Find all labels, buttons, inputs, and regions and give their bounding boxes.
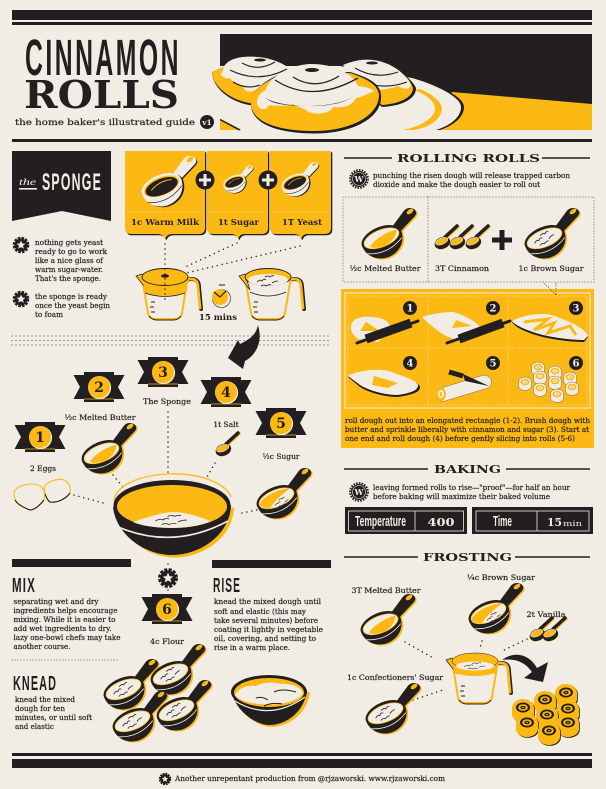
left roll xyxy=(212,57,300,106)
text block: sponge ready note: the sponge is ready xyxy=(35,293,107,301)
ingredient 5: sugar: 5 xyxy=(276,416,286,432)
title xyxy=(24,29,181,117)
footer credit: Another unrepentant production from @rjzaworski. www.rjzaworski.com xyxy=(174,775,445,783)
footer credit xyxy=(160,774,445,784)
panel: mix xyxy=(12,559,131,651)
arrow: to mixing bowl xyxy=(228,325,260,369)
heading: baking: BAKING xyxy=(434,462,501,476)
text block: proof note: leaving formed rolls to rise—"proof"—for half an hour xyxy=(373,484,571,492)
instructions: roll dough out into an elongated rectangle (1-2). Brush dough with xyxy=(345,417,590,425)
ingredient 5: sugar xyxy=(253,408,313,526)
ingredient 6: flour: 6 xyxy=(162,602,172,618)
step 4 xyxy=(348,356,420,397)
frosted rolls xyxy=(512,684,580,746)
plus signs xyxy=(196,170,278,190)
ingredient 4: salt: 1t Salt xyxy=(213,420,239,429)
text block: yeast note: warm sugar-water. xyxy=(35,266,103,274)
banner illustration: cinnamon rolls on plate xyxy=(212,34,592,134)
ingredient 3: the sponge: The Sponge xyxy=(143,397,192,406)
panel: rise: RISE xyxy=(213,574,241,597)
icon: cinnamon spoons xyxy=(433,226,489,252)
text block: sponge ready note: once the yeast begin xyxy=(35,302,111,310)
panel: rise: coating it lightly in vegetable xyxy=(214,626,323,634)
panel: mix: separating wet and dry xyxy=(14,598,99,606)
center roll xyxy=(251,64,381,134)
icon: yeast spoon xyxy=(279,162,319,201)
text block: sponge ready note: to foam xyxy=(35,311,63,319)
panel: temperature: 400 xyxy=(428,516,455,529)
panel: rise: rise in a warm place. xyxy=(214,644,290,652)
callout pointer xyxy=(543,282,556,295)
heading: rolling rolls: ROLLING ROLLS xyxy=(397,151,540,165)
frosting: confectioners sugar: 1c Confectioners' Sugar xyxy=(347,673,443,682)
text block: yeast note xyxy=(14,238,108,283)
bottom rules xyxy=(12,753,592,768)
mixing bowl xyxy=(113,474,234,558)
ingredient 1: eggs xyxy=(14,422,70,510)
panel: mix: add wet ingredients to dry. xyxy=(14,625,112,633)
text: CINNAMON xyxy=(25,29,181,86)
frosting: melted butter xyxy=(352,586,421,652)
ingredient 3: the sponge xyxy=(138,357,192,406)
step 2 xyxy=(422,301,510,343)
panel: rolling ingredients: 3T Cinnamon xyxy=(435,264,489,273)
text block: punching note: W xyxy=(354,174,365,184)
dotted divider xyxy=(12,336,331,345)
dotted lines into frosting cup xyxy=(405,639,527,700)
plate xyxy=(220,66,464,130)
ingredient 4: salt xyxy=(200,377,252,459)
subtitle: the home baker's illustrated guide xyxy=(15,118,195,128)
panel: knead: knead the mixed xyxy=(15,696,76,704)
top rules xyxy=(12,10,592,25)
step 1 xyxy=(351,301,418,343)
panel: temperature: Temperature xyxy=(355,513,406,530)
step 5 xyxy=(436,356,500,401)
panel: time: Time xyxy=(493,513,512,530)
panel: mix: mixing. While it is easier to xyxy=(14,616,116,624)
ingredient 3: the sponge: 3 xyxy=(158,365,168,381)
measuring cup: sponge start xyxy=(136,268,201,320)
panel: mix: ingredients helps encourage xyxy=(14,607,118,615)
instructions: butter and sprinkle liberally with cinnamon and sugar (3). Start at xyxy=(345,426,589,434)
frosting: brown sugar: ¼c Brown Sugar xyxy=(467,573,535,582)
text block: proof note xyxy=(350,483,571,501)
ingredient 4: salt: 4 xyxy=(221,385,231,401)
dotted lines into bowl xyxy=(74,412,257,513)
text block: punching note: punching the risen dough will release trapped carbon xyxy=(373,172,571,180)
icon: sugar spoon xyxy=(221,165,254,197)
panel: knead xyxy=(13,672,92,731)
panel: the sponge banner: the xyxy=(19,178,36,188)
step 6: 6 xyxy=(573,358,580,370)
right roll xyxy=(343,60,416,107)
panel: knead: dough for ten xyxy=(15,705,66,713)
text block: proof note: W xyxy=(354,487,365,497)
frosting: melted butter: 3T Melted Butter xyxy=(352,586,421,595)
instructions xyxy=(345,417,590,443)
panel: rolling ingredients: ½c Melted Butter xyxy=(350,264,421,273)
panel: temperature xyxy=(345,507,467,534)
frosting: vanilla: 2t Vanilla xyxy=(526,610,566,619)
icon: plus xyxy=(492,230,512,250)
ingredient 2: melted butter: ½c Melted Butter xyxy=(64,413,136,422)
section rule xyxy=(12,139,592,142)
heading: frosting: FROSTING xyxy=(423,550,512,564)
panel: the sponge banner xyxy=(12,151,111,221)
icon: gear connector xyxy=(160,564,176,591)
risen dough bowl xyxy=(231,675,310,727)
ingredient 6: flour xyxy=(100,594,213,749)
text block: yeast note: nothing gets yeast xyxy=(35,239,103,247)
icon: melted butter cup xyxy=(358,208,418,266)
frosting: brown sugar xyxy=(465,573,535,641)
panel: rise xyxy=(212,560,331,652)
panel: rolling ingredients: 1c Brown Sugar xyxy=(518,264,584,273)
text block: yeast note: like a nice glass of xyxy=(35,257,104,265)
text block: yeast note: That's the sponge. xyxy=(35,275,101,283)
ingredient 6: flour: 4c Flour xyxy=(150,637,184,646)
panel: rise: soft and elastic (this may xyxy=(214,608,306,616)
panel: the sponge banner: SPONGE xyxy=(42,169,102,196)
panel: knead: and elastic xyxy=(15,723,54,731)
step 1: 1 xyxy=(407,304,413,314)
title: ROLLS xyxy=(24,72,179,117)
panel: time: 15 xyxy=(547,516,562,529)
label: 15 mins: 15 mins xyxy=(199,313,237,323)
panel: rise: take several minutes) before xyxy=(214,617,318,625)
icon: timer xyxy=(212,285,230,308)
text block: proof note: before baking will maximize their baked volume xyxy=(373,493,550,501)
icon: brown sugar cup xyxy=(521,208,581,266)
subtitle xyxy=(15,115,214,129)
panel: sponge ingredient cards: 1c Warm Milk xyxy=(131,218,200,228)
step 2: 2 xyxy=(490,304,497,314)
text block: yeast note: ready to go to work xyxy=(35,248,108,256)
panel: rolling ingredients xyxy=(343,197,594,282)
text block: punching note: dioxide and make the dough easier to roll out xyxy=(373,181,540,189)
panel: time xyxy=(472,507,593,534)
step 4: 4 xyxy=(407,358,414,370)
panel: mix: MIX xyxy=(12,574,36,597)
measuring cup: foamed sponge xyxy=(239,268,304,320)
icon: milk cup xyxy=(138,156,197,214)
ingredient 1: eggs: 2 Eggs xyxy=(30,464,56,473)
frosting measuring cup xyxy=(446,653,511,704)
dotted divider xyxy=(12,659,118,661)
panel: sponge ingredient cards: 1T Yeast xyxy=(282,218,322,228)
step 6 xyxy=(518,356,583,402)
step 3 xyxy=(512,301,588,342)
instructions: one end and roll dough (4) before gently slicing into rolls (5-6) xyxy=(345,435,575,443)
panel: rise: oil, covering, and setting to xyxy=(214,635,316,643)
ingredient 5: sugar: ½c Sugur xyxy=(262,452,300,461)
ingredient 2: melted butter xyxy=(64,372,138,481)
step 3: 3 xyxy=(573,304,580,314)
panel: sponge ingredient cards: 1t Sugar xyxy=(218,218,260,228)
arrow: to frosted rolls xyxy=(502,655,548,682)
frosting: confectioners sugar xyxy=(347,673,443,741)
panel: time: min xyxy=(563,520,583,528)
frosting: vanilla xyxy=(526,610,566,644)
panel: knead: minutes, or until soft xyxy=(15,714,92,722)
text block: punching note xyxy=(350,170,571,189)
panel: mix: another course. xyxy=(14,643,70,651)
panel: rolling steps xyxy=(341,282,594,448)
panel: sponge ingredient cards xyxy=(125,151,332,240)
dotted lines to sponge cup xyxy=(165,243,300,300)
panel: mix: lazy one-bowl chefs may take xyxy=(14,634,121,642)
text block: sponge ready note xyxy=(14,292,111,319)
panel: knead: KNEAD xyxy=(13,672,57,695)
icon: eggs xyxy=(14,479,70,510)
ingredient 2: melted butter: 2 xyxy=(94,380,104,396)
step 5: 5 xyxy=(490,358,497,370)
panel: rise: knead the mixed dough until xyxy=(214,598,322,606)
subtitle: v1 xyxy=(201,118,212,127)
ingredient 1: eggs: 1 xyxy=(35,430,45,446)
